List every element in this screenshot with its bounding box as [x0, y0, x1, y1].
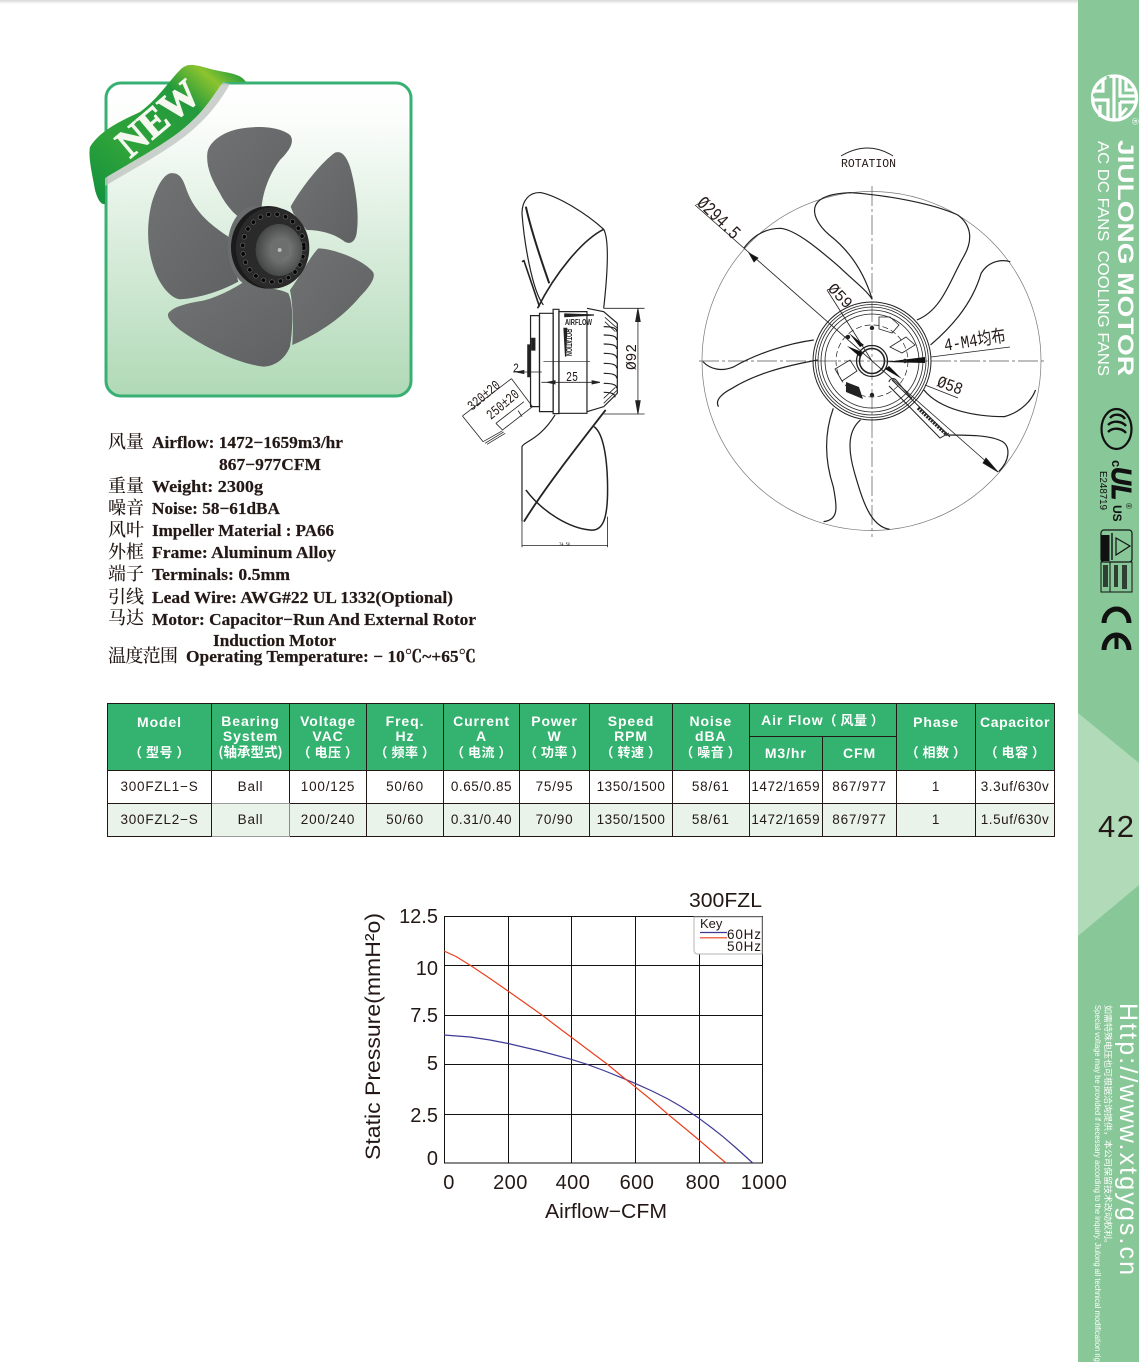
spec: temperature [108, 642, 476, 668]
side view dimension text: Ø92 [624, 344, 641, 370]
specification table: System [223, 728, 278, 744]
specification table: （ 电压 ） [298, 742, 358, 761]
specification table: 1350/1500 [597, 779, 665, 794]
specification table: 0.65/0.85 [451, 779, 512, 794]
specification table: （ 转速 ） [601, 742, 661, 761]
spec: motor [108, 604, 476, 650]
side view dimension text: 250±20 [484, 387, 523, 424]
icon: UL mark: c [1109, 460, 1124, 467]
top edge shading [0, 0, 1078, 4]
side view dimension text: AIRFLOW [565, 318, 592, 327]
spec: lead wire [108, 583, 453, 609]
y axis tick labels: 0 [427, 1148, 438, 1170]
y axis tick labels: 10 [416, 958, 438, 980]
spec: temperature: Operating Temperature: − 10℃~+65℃ [186, 647, 476, 666]
specification table: （ 频率 ） [375, 742, 435, 761]
specification table: 1472/1659 [751, 779, 820, 794]
motor hub [228, 206, 309, 289]
spec: frame [108, 538, 337, 564]
side view dimension text: 25 [566, 370, 578, 386]
specification table: M3/hr [765, 745, 807, 761]
dimension lines [462, 308, 645, 547]
centre lines [699, 186, 1046, 537]
specification table: （ 电流 ） [451, 742, 512, 761]
spec: impeller: 风叶 [108, 516, 144, 542]
specification table: 300FZL2−S [120, 812, 199, 827]
spec: lead wire: 引线 [108, 583, 144, 609]
spec: motor: 马达 [108, 604, 145, 630]
specification table: Voltage [300, 713, 356, 729]
specification table: Ball [238, 812, 263, 827]
specification table: 867/977 [832, 812, 887, 827]
spec: noise: Noise: 58−61dBA [152, 499, 281, 518]
specification table: CFM [843, 745, 876, 761]
fan blades [148, 127, 374, 367]
y axis tick labels: 5 [427, 1053, 438, 1075]
rotation label: ROTATION [841, 158, 896, 171]
specification table: 50/60 [386, 812, 424, 827]
ribbon label: NEW [107, 70, 209, 166]
y axis tick labels: 12.5 [399, 906, 438, 928]
sidebar light chevron [1078, 713, 1139, 936]
performance chart [362, 890, 787, 1223]
specification table: 1.5uf/630v [981, 812, 1049, 827]
x axis tick labels: 200 [493, 1172, 528, 1194]
specification table: Hz [396, 728, 414, 744]
specification table: dBA [695, 728, 726, 744]
spec: airflow: 867−977CFM [219, 455, 321, 474]
dimension labels: Ø294.5 [692, 192, 745, 244]
rotation label [841, 148, 896, 171]
motor hub rings [813, 302, 931, 420]
x axis title: Airflow−CFM [545, 1201, 667, 1223]
side view motor [528, 308, 617, 414]
specification table: Bearing [221, 713, 280, 729]
specification table: 75/95 [536, 779, 573, 794]
specification table: W [547, 728, 562, 744]
y axis tick labels: 7.5 [410, 1005, 438, 1027]
front view blades [703, 193, 1036, 529]
specification table: Noise [689, 713, 732, 729]
specification table: 100/125 [301, 779, 355, 794]
x axis tick labels: 400 [556, 1172, 590, 1194]
spec list [108, 428, 476, 668]
spec: noise: 噪音 [108, 494, 144, 520]
dimension labels: Ø59 [823, 280, 856, 313]
chart title: 300FZL [689, 890, 762, 912]
icon: CE mark [1104, 609, 1129, 650]
specification table: 1350/1500 [597, 812, 665, 827]
spec: motor: Motor: Capacitor−Run And External Rotor [152, 610, 476, 629]
specification table: （ 相数 ） [906, 742, 966, 761]
spec: terminals: Terminals: 0.5mm [152, 565, 290, 584]
chart grid [444, 916, 762, 1163]
x axis tick labels: 0 [443, 1172, 455, 1194]
specification table: 1 [932, 779, 940, 794]
page number: 42 [1098, 809, 1135, 844]
specification table: 58/61 [692, 812, 730, 827]
specification table: Speed [608, 713, 654, 729]
specification table: Ball [238, 779, 263, 794]
specification table: Model [137, 714, 182, 730]
spec: noise [108, 494, 281, 520]
front view drawing [692, 148, 1046, 537]
side view dimension text: 2 [513, 361, 519, 376]
icon: safety label [1101, 530, 1132, 592]
side view dimension text: 74.50 [559, 542, 570, 548]
outer diameter circle [702, 192, 1041, 530]
x axis tick labels: 600 [620, 1172, 654, 1194]
side view drawing [462, 193, 645, 548]
icon: CCC mark [1102, 409, 1132, 449]
spec: frame: 外框 [108, 538, 144, 564]
side view dimension text: 320±20 [465, 378, 504, 415]
specification table: 867/977 [832, 779, 887, 794]
specification table: Phase [913, 714, 959, 730]
specification table: 50/60 [386, 779, 424, 794]
y axis tick labels: 2.5 [410, 1105, 438, 1127]
specification table: Capacitor [980, 714, 1050, 730]
sidebar [1078, 0, 1139, 1362]
new ribbon [89, 65, 246, 204]
lead wire [889, 379, 950, 438]
specification table: （ 功率 ） [524, 742, 585, 761]
spec: frame: Frame: Aluminum Alloy [152, 543, 337, 562]
legend: 50Hz [727, 939, 761, 954]
x axis tick labels [443, 1172, 787, 1194]
spec: weight: 重量 [108, 472, 144, 498]
spec: terminals: 端子 [108, 560, 144, 586]
dimension labels: 4-M4均布 [942, 325, 1007, 357]
specification table: (轴承型式) [218, 741, 283, 761]
spec: motor: Induction Motor [213, 631, 336, 650]
panel: product photo [89, 65, 411, 396]
specification table: 1 [932, 812, 940, 827]
specification table: 58/61 [692, 779, 730, 794]
icon: UL mark: E248719 [1097, 471, 1109, 510]
spec: airflow: 风量 [108, 428, 144, 454]
specification table: 3.3uf/630v [981, 779, 1049, 794]
icon: UL mark [1097, 460, 1137, 522]
specification table [107, 703, 1055, 837]
dimension labels [692, 192, 1007, 401]
y axis title: Static Pressure(mmH²o) [362, 913, 385, 1160]
spec: airflow [108, 428, 343, 474]
spec: lead wire: Lead Wire: AWG#22 UL 1332(Optional) [152, 588, 453, 607]
spec: terminals [108, 560, 290, 586]
specification table: Air Flow（ 风量 ） [761, 710, 884, 729]
y axis tick labels [399, 906, 438, 1170]
spec: temperature: 温度范围 [108, 642, 178, 668]
specification table: （ 噪音 ） [680, 742, 741, 761]
spec: impeller [108, 516, 334, 542]
specification table: 70/90 [536, 812, 573, 827]
spec: weight: Weight: 2300g [152, 477, 264, 496]
spec: impeller: Impeller Material : PA66 [152, 521, 334, 540]
specification table: （ 型号 ） [129, 742, 190, 761]
specification table: 1472/1659 [751, 812, 820, 827]
icon: UL mark: US [1110, 505, 1124, 522]
specification table: RPM [614, 728, 648, 744]
dimension labels: Ø58 [934, 374, 965, 401]
side view blades [522, 193, 608, 530]
specification table: Freq. [386, 713, 424, 729]
logo mark [1092, 76, 1136, 120]
x axis tick labels: 800 [686, 1172, 720, 1194]
specification table: （ 电容 ） [985, 742, 1045, 761]
legend [694, 916, 762, 954]
curve: 60Hz [444, 1035, 753, 1163]
curve: 50Hz [444, 951, 726, 1163]
specification table: A [476, 728, 487, 744]
legend: Key [700, 916, 723, 931]
specification table: 200/240 [301, 812, 355, 827]
side view dimension text [465, 318, 641, 548]
diameter dimension lines [695, 205, 1010, 472]
x axis tick labels: 1000 [741, 1172, 787, 1194]
specification table: 300FZL1−S [120, 779, 199, 794]
side view dimension text: ROTATION [564, 329, 573, 356]
specification table: 0.31/0.40 [451, 812, 512, 827]
legend: 60Hz [727, 927, 761, 942]
icon: UL mark: ® [1124, 503, 1133, 509]
specification table: VAC [312, 728, 344, 744]
spec: weight [108, 472, 264, 498]
specification table: Current [453, 713, 510, 729]
chinese note: 如需特殊电压也可根据洽询提供，本公司保留技术改动权利。 [1102, 1005, 1114, 1248]
brand tagline: AC DC FANS COOLING FANS [1094, 141, 1111, 376]
icon: UL mark: UL [1106, 467, 1137, 500]
spec: airflow: Airflow: 1472−1659m3/hr [152, 433, 343, 452]
brand name: JIULONG MOTOR [1113, 140, 1138, 376]
photo: fan impeller [148, 127, 374, 367]
specification table: Power [531, 713, 578, 729]
